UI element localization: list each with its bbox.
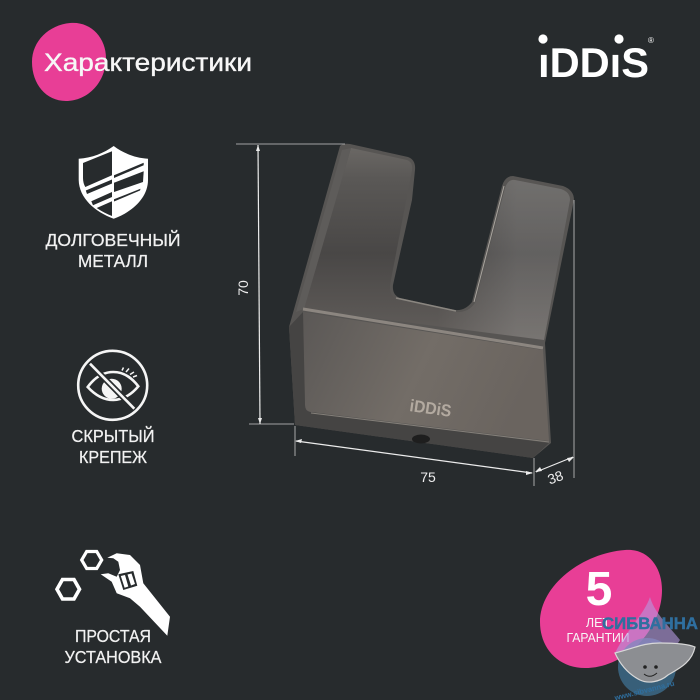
icon: crossed-out eye xyxy=(78,351,147,420)
label: ПРОСТАЯ xyxy=(75,626,151,646)
brand logo: ıDDıS xyxy=(538,39,649,86)
dimension: height 70 xyxy=(235,144,345,424)
dimension: depth 38: 38 xyxy=(545,467,566,487)
heading: Характеристики xyxy=(32,23,252,101)
brand logo: ® xyxy=(648,36,654,45)
heading: Характеристики: Характеристики xyxy=(44,49,252,77)
warranty badge xyxy=(540,550,662,668)
warranty badge: ГАРАНТИИ xyxy=(566,631,630,645)
icon: shield xyxy=(79,146,148,219)
dimension: depth 38 xyxy=(535,200,574,487)
watermark: Сибванна xyxy=(602,597,698,700)
label: ДОЛГОВЕЧНЫЙ xyxy=(46,229,180,250)
feature: easy installation: УСТАНОВКА xyxy=(64,647,162,667)
feature: durable metal: МЕТАЛЛ xyxy=(78,251,148,271)
icon: wrench and nuts xyxy=(57,552,170,636)
product body xyxy=(289,144,574,458)
feature: hidden fastening xyxy=(72,351,154,467)
warranty badge: 5 xyxy=(586,563,612,616)
dimension: width 75: 75 xyxy=(420,469,436,485)
label: СКРЫТЫЙ xyxy=(72,425,154,446)
product: hook with dimensions xyxy=(235,144,574,487)
warranty badge: ЛЕТ xyxy=(586,616,610,630)
feature: hidden fastening: КРЕПЕЖ xyxy=(79,447,147,467)
dimension: height 70: 70 xyxy=(235,280,251,296)
feature: durable metal xyxy=(46,146,180,271)
dimension: width 75 xyxy=(295,426,534,486)
feature: easy installation xyxy=(57,552,170,667)
watermark: Сибванна: СИБВАННА xyxy=(602,614,698,633)
engraved logo: iDDiS xyxy=(408,396,453,421)
